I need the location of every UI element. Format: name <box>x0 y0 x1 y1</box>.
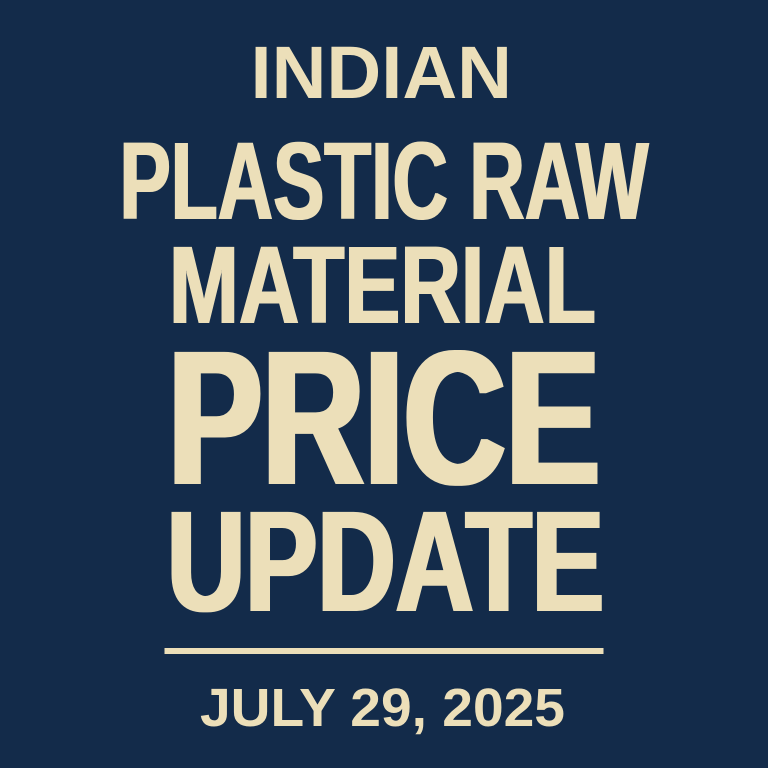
heading: UPDATE: UPDATE <box>167 481 604 642</box>
divider rule <box>164 648 604 654</box>
heading: INDIAN: INDIAN <box>250 31 512 114</box>
heading: PRICE: PRICE <box>168 310 600 525</box>
date: JULY 29, 2025: JULY 29, 2025 <box>200 678 565 738</box>
heading: MATERIAL: MATERIAL <box>169 224 596 347</box>
